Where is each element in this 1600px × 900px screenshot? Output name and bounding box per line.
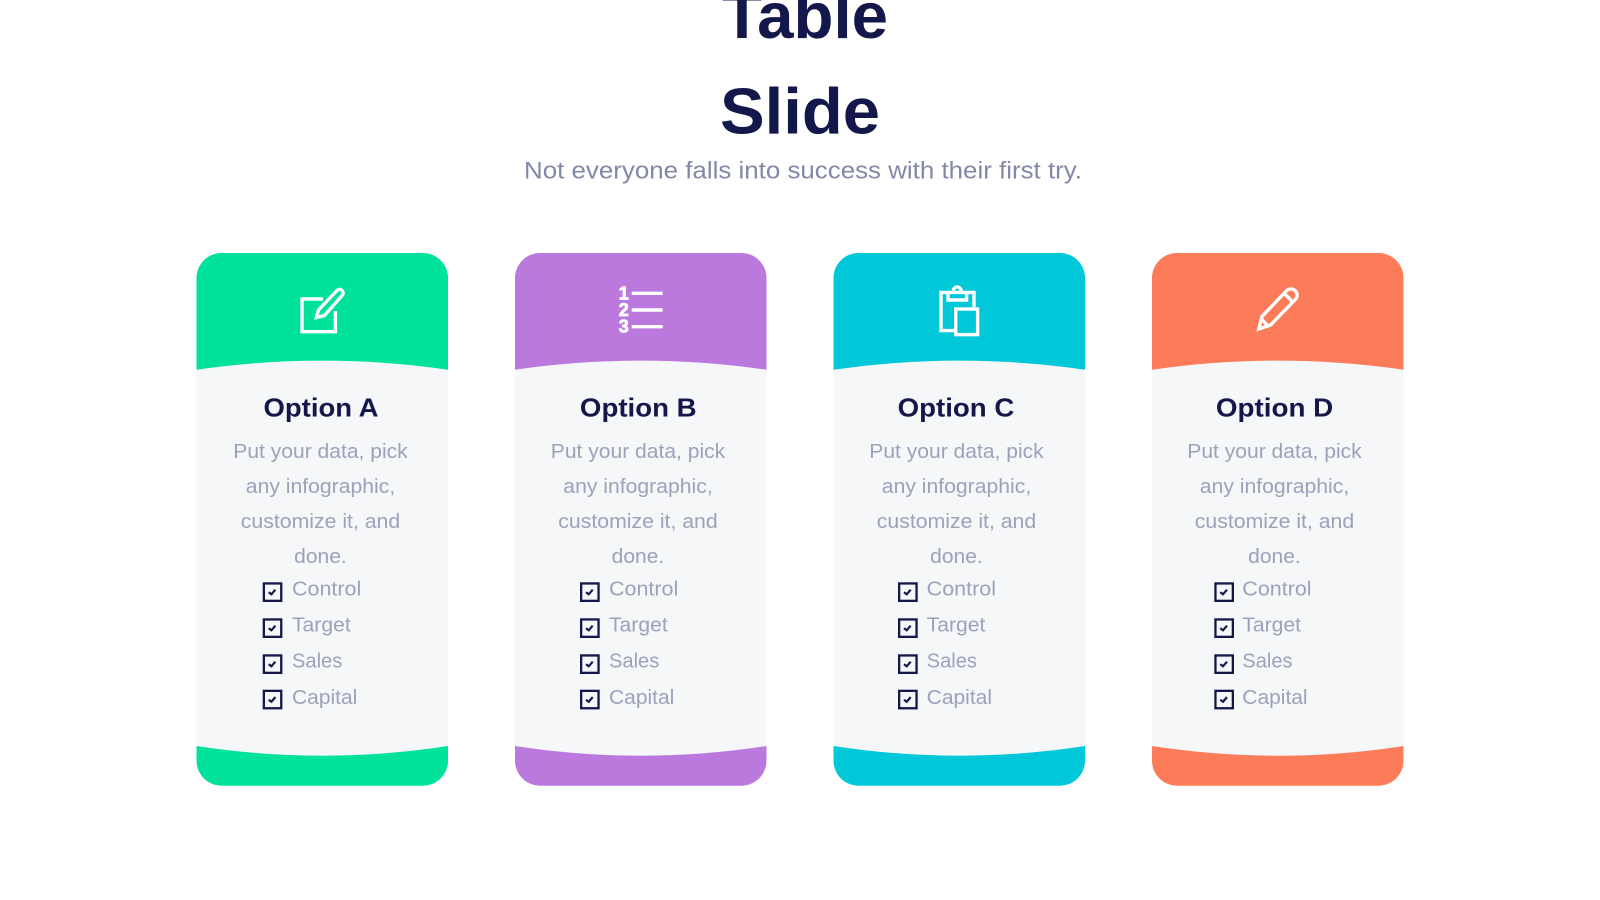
icon: pencil — [1259, 289, 1297, 329]
checklist D: Control — [1242, 578, 1312, 601]
checklist C: Control — [927, 578, 996, 601]
text block: description C — [869, 440, 1044, 568]
checklist B: Control — [609, 578, 678, 601]
checklist C — [899, 578, 996, 709]
icon: numbered list: 1 — [619, 283, 629, 303]
checklist C: Target — [927, 614, 986, 637]
header band: orange — [1152, 253, 1404, 370]
text block: description A — [233, 440, 408, 568]
text block: description C: Put your data, pick — [869, 440, 1044, 463]
panel: Option A — [196, 253, 448, 786]
icon: note with pencil — [302, 289, 343, 332]
icon: clipboard — [941, 287, 978, 335]
checklist A: Sales — [292, 649, 342, 672]
header band: green — [196, 253, 448, 370]
text block: description A: Put your data, pick — [233, 440, 408, 463]
text block: description D: done. — [1248, 545, 1301, 568]
text block: description D: any infographic, — [1200, 475, 1349, 498]
text block: description B: customize it, and — [558, 510, 718, 533]
text block: description A: any infographic, — [246, 475, 395, 498]
footer band: orange — [1152, 746, 1404, 786]
text block: description A: customize it, and — [241, 510, 400, 533]
checklist C: Capital — [927, 686, 992, 709]
heading: Option B: Option B — [580, 393, 697, 423]
checklist A: Capital — [292, 686, 357, 709]
header band: cyan — [834, 253, 1085, 370]
panel: Option B — [515, 253, 766, 786]
text block: description B: any infographic, — [563, 475, 713, 498]
title: Slide — [720, 74, 880, 148]
icon: numbered list: 3 — [619, 316, 629, 336]
panel: Option D — [1152, 253, 1404, 786]
checklist A: Control — [292, 578, 361, 601]
text block: description C: any infographic, — [882, 475, 1031, 498]
text block: description C: done. — [930, 545, 983, 568]
text block: description B — [551, 440, 726, 568]
checklist A — [264, 578, 361, 709]
text block: description B: done. — [612, 545, 664, 568]
checklist B: Capital — [609, 686, 674, 709]
footer band: cyan — [834, 746, 1085, 786]
text block: description D: customize it, and — [1195, 510, 1354, 533]
text block: description D: Put your data, pick — [1187, 440, 1362, 463]
checklist D: Capital — [1242, 686, 1308, 709]
header band: purple — [515, 253, 766, 370]
checklist D: Target — [1242, 614, 1301, 637]
footer band: purple — [515, 746, 766, 786]
title — [720, 0, 888, 148]
icon: numbered list — [619, 283, 663, 336]
text block: description B: Put your data, pick — [551, 440, 726, 463]
checklist D — [1215, 578, 1312, 709]
text block: description A: done. — [294, 545, 347, 568]
checklist C: Sales — [927, 649, 977, 672]
text block: description D — [1187, 440, 1362, 568]
panel: Option C — [834, 253, 1085, 786]
text block: description C: customize it, and — [877, 510, 1036, 533]
checklist B: Target — [609, 614, 668, 637]
checklist A: Target — [292, 614, 351, 637]
checklist B: Sales — [609, 649, 659, 672]
subtitle: Not everyone falls into success with their first try. — [524, 158, 1082, 184]
checklist B — [581, 578, 678, 709]
icon: numbered list: 2 — [619, 300, 629, 320]
heading: Option A: Option A — [264, 393, 379, 423]
footer band: green — [196, 746, 448, 786]
checklist D: Sales — [1242, 649, 1293, 672]
heading: Option D: Option D — [1216, 393, 1333, 423]
heading: Option C: Option C — [898, 393, 1015, 423]
